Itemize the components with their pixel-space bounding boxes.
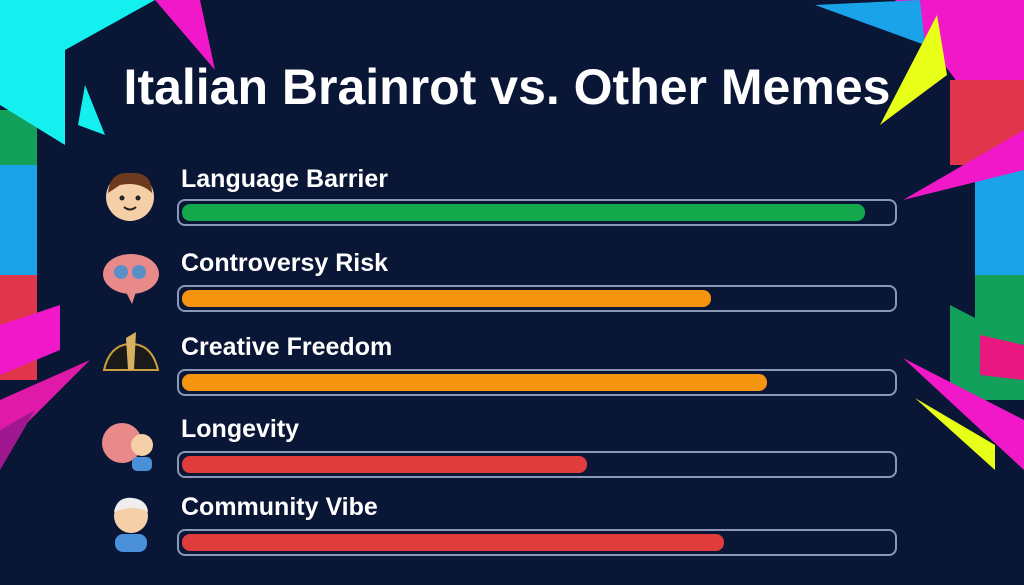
icon: man xyxy=(114,498,148,552)
bar: Controversy Risk xyxy=(177,285,897,312)
text: Language Barrier xyxy=(181,165,388,193)
icon: brain with boy xyxy=(102,423,153,471)
text: Controversy Risk xyxy=(181,249,388,277)
icon: brain with gears xyxy=(103,254,159,304)
bar: Language Barrier xyxy=(177,199,897,226)
text: Creative Freedom xyxy=(181,333,392,361)
row: Language Barrier xyxy=(106,172,154,221)
title: Italian Brainrot vs. Other Memes xyxy=(124,59,890,115)
bar: Community Vibe xyxy=(177,529,897,556)
text: Community Vibe xyxy=(181,493,378,521)
icon: boy face xyxy=(106,172,154,221)
text: Longevity xyxy=(181,415,299,443)
icon: creative hat xyxy=(102,332,160,371)
bar: Longevity xyxy=(177,451,897,478)
bar: Creative Freedom xyxy=(177,369,897,396)
